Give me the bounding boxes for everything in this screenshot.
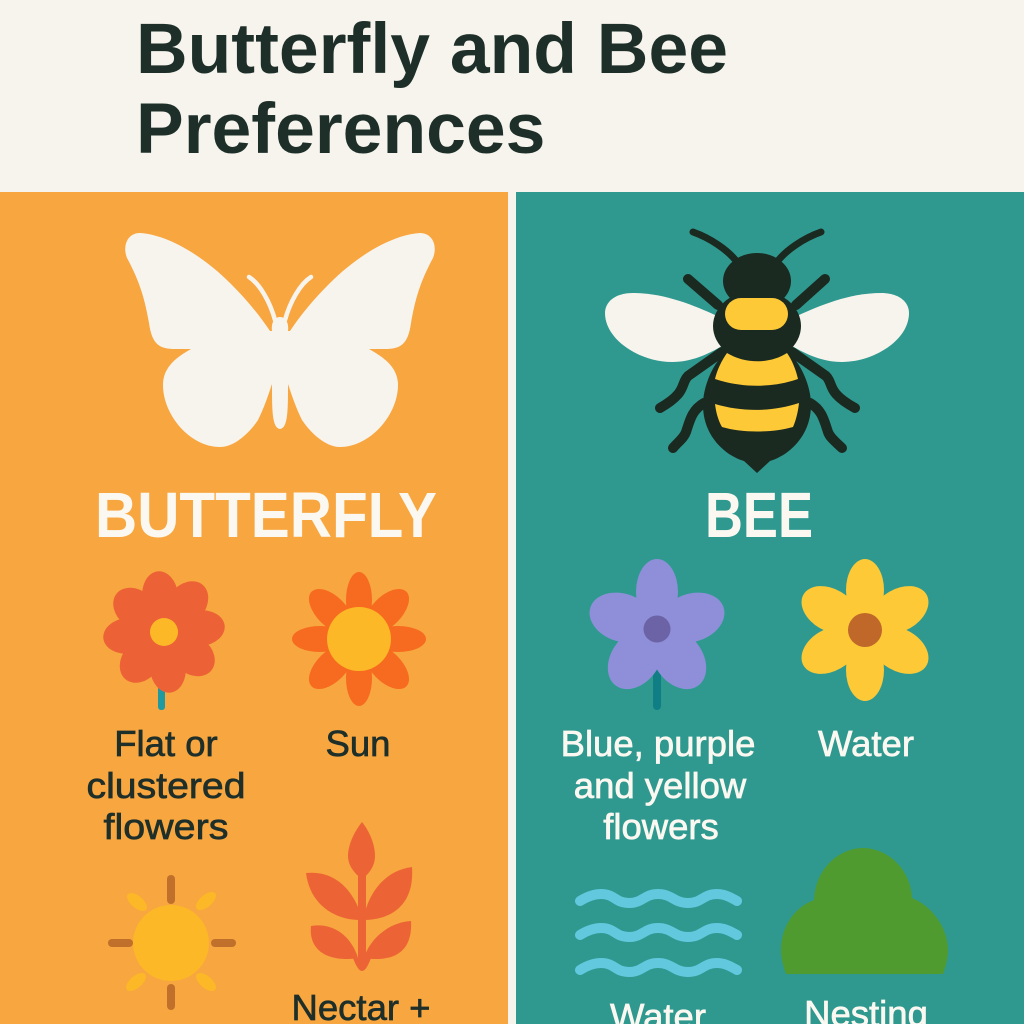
label: sun: Sun	[326, 723, 390, 764]
bee yellow stripes	[715, 298, 799, 432]
icon: red flat flower	[101, 569, 227, 710]
label: flat or clustered flowers: clustered	[86, 765, 246, 806]
bee wings	[605, 293, 909, 362]
label: blue, purple and yellow flowers: Blue, purple	[561, 723, 755, 764]
title: Preferences	[136, 89, 545, 169]
bee body	[703, 253, 811, 473]
panel: butterfly	[0, 192, 508, 1024]
icon: sun	[108, 875, 236, 1010]
label: flat or clustered flowers: flowers	[104, 806, 228, 847]
label: blue, purple and yellow flowers: flowers	[603, 806, 719, 847]
icon: purple flower	[583, 559, 731, 710]
label: flat or clustered flowers: Flat or	[114, 723, 218, 764]
title: Butterfly and Bee	[136, 9, 728, 89]
icon: bee	[605, 232, 909, 473]
icon: butterfly silhouette	[125, 233, 435, 447]
label: water: Water	[818, 723, 914, 764]
panel: bee	[516, 192, 1024, 1024]
icon: orange sun flower	[292, 572, 426, 706]
label: blue, purple and yellow flowers: and yellow	[574, 765, 747, 806]
heading: butterfly: BUTTERFLY	[95, 479, 437, 551]
icon: water waves	[580, 894, 737, 972]
bee legs and antennae	[660, 232, 855, 448]
icon: green bush	[781, 848, 948, 974]
title	[136, 9, 728, 169]
icon: leaf sprig	[306, 822, 412, 971]
icon: yellow flower	[793, 559, 937, 701]
heading: bee: BEE	[705, 479, 813, 551]
